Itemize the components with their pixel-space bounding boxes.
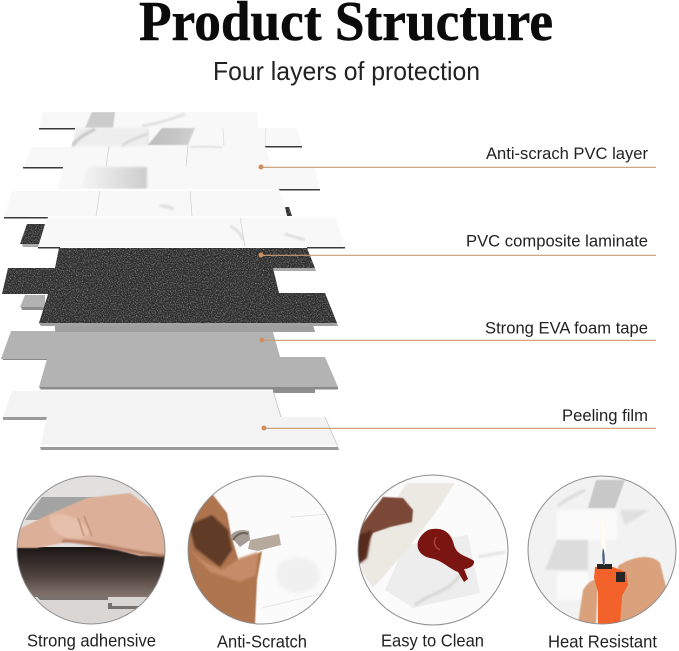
caption: Anti-Scratch [217, 632, 307, 651]
caption: Strong adhensive [27, 630, 156, 650]
feature: heat resistant [528, 476, 679, 651]
subtitle: Four layers of protection [213, 56, 480, 86]
callout: Strong EVA foam tape [260, 320, 656, 342]
callout: Anti-scrach PVC layer: Anti-scrach PVC layer [486, 145, 648, 163]
callout: Peeling film: Peeling film [562, 407, 648, 425]
layer stack diagram [0, 112, 345, 450]
layer: anti-scratch PVC [0, 112, 345, 248]
callout: PVC composite laminate: PVC composite laminate [466, 232, 648, 250]
feature: strong adhesive [17, 476, 166, 650]
layer: EVA foam tape [1, 295, 338, 393]
caption: Easy to Clean [381, 630, 484, 650]
layer: PVC composite laminate [0, 205, 340, 327]
photo circle: key scratching tile [188, 476, 336, 624]
callout: Strong EVA foam tape: Strong EVA foam tape [485, 320, 648, 338]
photo circle: wiping stain [358, 475, 508, 625]
feature: anti-scratch [188, 476, 336, 651]
caption: Heat Resistant [548, 632, 657, 651]
layer: peeling film [3, 391, 339, 450]
callout: PVC composite laminate [258, 232, 656, 258]
photo circle: hand pressing tile [17, 476, 166, 624]
photo circle: lighter flame on tile [528, 476, 679, 624]
feature: easy to clean [358, 475, 508, 650]
callout: Peeling film [262, 407, 656, 430]
callout: Anti-scrach PVC layer [258, 145, 656, 170]
